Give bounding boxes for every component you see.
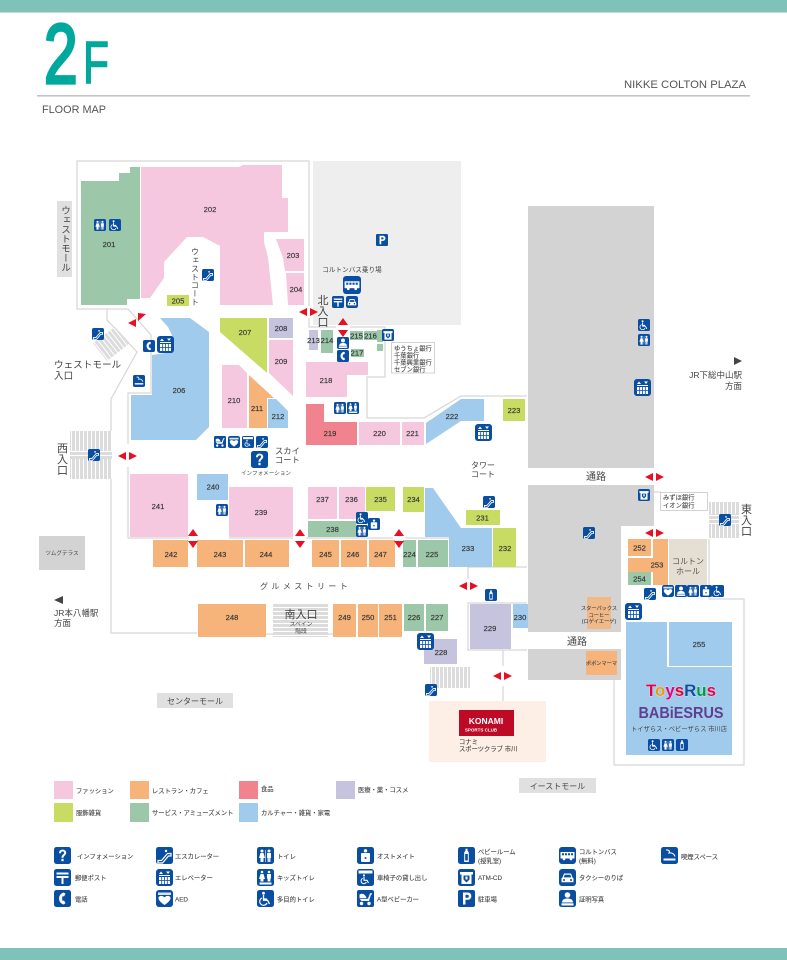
icon legend: A型ベビーカー — [377, 894, 419, 904]
Tsumugu terrace: ツムグテラス — [45, 549, 79, 557]
icon legend: 多目的トイレ — [277, 894, 315, 904]
subtitle: FLOOR MAP — [42, 104, 106, 116]
shop 236: 236 — [345, 495, 358, 504]
shop 226 — [404, 604, 424, 631]
title: 2F — [44, 7, 109, 101]
colour legend: レストラン・カフェ — [152, 787, 209, 795]
shop 253 — [628, 539, 668, 585]
shop 241 — [130, 474, 188, 537]
south entrance: スペイン — [290, 621, 313, 628]
shop 213: 213 — [307, 336, 320, 345]
shop 202: 202 — [204, 205, 216, 214]
Konami logo: KONAMI — [469, 716, 503, 726]
mizuho bank box: イオン銀行 — [663, 500, 695, 510]
shop 239 — [229, 487, 293, 537]
north entrance label: 北入口 — [316, 294, 328, 328]
shop 211 — [249, 375, 274, 428]
shop 245: 245 — [319, 550, 332, 559]
tower court label: コート — [471, 470, 495, 479]
red entrance arrows — [118, 308, 664, 680]
shop 248 — [198, 604, 266, 637]
Tsumugu terrace — [39, 536, 85, 570]
shop 237 — [308, 487, 337, 519]
icon legend: タクシーのりば — [579, 873, 624, 882]
mizuho bank box: みずほ銀行 — [663, 492, 695, 502]
gourmet street label: グルメストリート — [260, 581, 351, 591]
east entrance stairs — [709, 502, 739, 538]
shop 240 — [197, 474, 228, 500]
south entrance — [273, 604, 328, 637]
Konami caption: コナミ — [459, 738, 478, 746]
shop 224: 224 — [403, 550, 416, 559]
south stairs — [430, 667, 470, 688]
JR Shimosa-Nakayama direction: 方面 — [725, 381, 742, 391]
shop 254 — [628, 572, 651, 585]
passage label upper: 通路 — [586, 470, 606, 483]
shop 248: 248 — [226, 613, 238, 622]
colour legend: 服飾雑貨 — [76, 808, 101, 817]
icon legend: オストメイト — [377, 852, 415, 860]
shop 204: 204 — [290, 285, 302, 294]
icon legend: 証明写真 — [579, 894, 604, 904]
west mall stairs — [93, 327, 130, 361]
colour legend: 食品 — [261, 785, 274, 793]
Colton bus stop label: コルトンバス乗り場 — [322, 265, 382, 274]
shop 202 — [141, 165, 288, 305]
shop 204 — [286, 273, 304, 305]
shop 238: 238 — [326, 525, 339, 534]
shop 242 — [153, 540, 188, 567]
colour legend: 医療・薬・コスメ — [358, 785, 408, 794]
grey east mall block bottom — [528, 649, 621, 680]
west mall entrance label: 入口 — [54, 371, 73, 382]
Starbucks — [581, 597, 617, 629]
shop 222 — [426, 399, 484, 444]
icon legend: エスカレーター — [175, 852, 219, 860]
bank box: 千葉銀行 — [394, 350, 420, 360]
grey parking area — [313, 161, 461, 325]
shop 234 — [403, 487, 424, 512]
shop 235: 235 — [374, 495, 387, 504]
shop 239: 239 — [255, 508, 267, 517]
shop 210 — [222, 365, 247, 428]
shop 244: 244 — [260, 550, 272, 559]
shop 218: 218 — [320, 376, 332, 385]
shop 240: 240 — [207, 482, 219, 492]
icon legend: 駐車場 — [478, 894, 498, 904]
shop 254: 254 — [633, 574, 646, 584]
grey east mall block upper — [528, 206, 654, 468]
shop 241: 241 — [152, 502, 164, 511]
shop 210: 210 — [228, 396, 240, 405]
shop 209 — [269, 340, 293, 396]
icon legend: (授乳室) — [478, 856, 501, 865]
shop 237: 237 — [316, 495, 329, 504]
shop 250 — [358, 604, 378, 637]
shop 229: 229 — [484, 624, 496, 633]
shop 208 — [269, 318, 293, 338]
icon legend: インフォメーション — [77, 852, 133, 860]
shop 252 — [628, 539, 651, 556]
tower court label — [471, 461, 495, 479]
shop 247: 247 — [374, 550, 387, 559]
shop 201 — [81, 167, 140, 305]
west mall entrance label: ウェストモール — [54, 360, 122, 371]
shop 249: 249 — [338, 613, 351, 622]
shop 220: 220 — [373, 429, 386, 438]
shop 231: 231 — [476, 514, 489, 522]
icon legend: キッズトイレ — [277, 873, 315, 882]
information label: インフォメーション — [241, 470, 291, 477]
shop 250: 250 — [362, 613, 374, 622]
shop 246: 246 — [347, 550, 359, 559]
bank box: セブン銀行 — [394, 364, 426, 374]
shop 252: 252 — [633, 544, 646, 552]
top band — [0, 0, 787, 12]
colour legend — [54, 781, 408, 822]
shop 245 — [312, 540, 339, 567]
shop 228 — [424, 639, 457, 664]
icon legend: エレベーター — [175, 873, 213, 882]
shop 223: 223 — [508, 406, 520, 415]
shop 242: 242 — [165, 550, 177, 559]
shop 225: 225 — [426, 550, 438, 559]
small service units — [377, 330, 383, 351]
east mall label — [519, 778, 596, 793]
bank box: 千葉興業銀行 — [394, 358, 432, 366]
west entrance stairs — [70, 431, 112, 479]
shop 216: 216 — [364, 332, 377, 340]
Toys R Us store — [626, 622, 732, 755]
shop 246 — [341, 540, 367, 567]
shop 213 — [307, 330, 320, 350]
shop 207: 207 — [239, 328, 251, 337]
bank box: ゆうちょ銀行 — [394, 344, 432, 352]
shop 226: 226 — [408, 613, 420, 622]
shop 212 — [268, 399, 288, 428]
shop 220 — [359, 422, 400, 445]
shop 235 — [366, 487, 395, 511]
shop 209: 209 — [275, 357, 287, 366]
shop 236 — [339, 487, 365, 519]
shop 232 — [493, 528, 516, 567]
title: 2F: 2 — [44, 7, 78, 101]
passage label lower: 通路 — [567, 635, 587, 648]
Starbucks: コーヒー — [589, 612, 609, 619]
shop 222: 222 — [446, 412, 458, 421]
shop 253: 253 — [651, 560, 663, 570]
label: west mall: ウェストモール — [59, 206, 71, 272]
header rule — [37, 95, 750, 96]
Konami sports club — [429, 701, 546, 762]
shop 223 — [503, 399, 525, 421]
shop 243: 243 — [214, 550, 226, 559]
colour legend: サービス・アミューズメント — [152, 808, 233, 817]
JR Motoyawata direction — [54, 596, 99, 628]
Toys R Us store: 255 — [693, 640, 705, 649]
icon legend: トイレ — [277, 854, 296, 860]
shop 229 — [470, 604, 511, 649]
Colton Hall: ホール — [676, 567, 700, 576]
Popomama — [586, 651, 617, 675]
icon legend: AED — [175, 896, 188, 904]
shop 208: 208 — [275, 324, 287, 333]
Toys R Us logo: ToysRus — [646, 681, 716, 700]
shop 224 — [403, 540, 416, 567]
shop 230 — [513, 604, 528, 628]
map icons — [88, 219, 731, 751]
Konami logo: SPORTS CLUB — [465, 728, 498, 732]
shop 203 — [276, 239, 304, 271]
shop 207 — [220, 318, 267, 373]
icon legend — [54, 847, 718, 907]
icon legend: 郵便ポスト — [75, 874, 106, 882]
Popomama: ポポンマーマ — [586, 659, 617, 667]
sky court label — [275, 446, 300, 465]
west court label: ウェストコート — [190, 248, 200, 306]
shop 247 — [369, 540, 395, 567]
store caption: トイザらス・ベビーザらス 市川店 — [631, 724, 727, 733]
shop 219 — [306, 404, 357, 445]
shop 233: 233 — [462, 544, 474, 553]
south entrance: 南入口 — [284, 608, 318, 621]
colour legend: カルチャー・雑貨・家電 — [261, 808, 331, 817]
shop 219: 219 — [324, 429, 336, 438]
shop 238 — [308, 521, 356, 537]
shop 211: 211 — [251, 404, 263, 413]
shop 228: 228 — [435, 648, 447, 657]
JR Shimosa-Nakayama direction — [689, 357, 742, 391]
shop 230: 230 — [514, 613, 526, 622]
building outlines — [77, 161, 744, 765]
shop 233 — [425, 488, 492, 567]
icon legend: (無料) — [579, 856, 596, 865]
shop 221 — [402, 422, 424, 445]
shop 249 — [333, 604, 356, 637]
brand name: NIKKE COLTON PLAZA — [624, 79, 747, 91]
colour legend: ファッション — [76, 787, 114, 795]
shop 206 — [131, 318, 209, 440]
Colton Hall — [669, 539, 707, 585]
shop 231 — [466, 510, 500, 525]
shop 214 — [321, 330, 333, 353]
shop 205 — [167, 295, 189, 306]
shop 201: 201 — [103, 240, 115, 249]
icon legend: ATM-CD — [478, 875, 502, 882]
Starbucks: (ロゲイエーゲ) — [582, 617, 616, 625]
icon legend: ベビールーム — [478, 847, 516, 856]
bank box — [392, 342, 434, 374]
shop 227 — [426, 604, 448, 631]
sky court label: スカイ — [275, 446, 300, 456]
Babies R Us logo: BABiESRUS — [638, 705, 724, 722]
shop 251 — [379, 604, 402, 637]
icon legend: コルトンバス — [579, 848, 617, 856]
shop 251: 251 — [384, 613, 397, 622]
east mall label: イーストモール — [530, 782, 585, 791]
JR Shimosa-Nakayama direction: JR下総中山駅 — [689, 370, 742, 380]
shop 244 — [245, 540, 289, 567]
center mall label — [157, 693, 233, 708]
icon legend: 車椅子の貸し出し — [377, 873, 427, 882]
shop 221: 221 — [406, 429, 419, 438]
shop 225 — [418, 540, 448, 567]
shop 214: 214 — [321, 336, 333, 345]
Starbucks: スターバックス — [581, 604, 617, 612]
grey east mall block lower — [528, 485, 654, 632]
shop 205: 205 — [172, 296, 184, 306]
label: west mall — [57, 201, 72, 277]
east entrance label: 東入口 — [740, 503, 752, 536]
bottom band — [0, 948, 787, 960]
mizuho bank box — [660, 492, 708, 510]
shop 215: 215 — [350, 332, 363, 340]
shop 227: 227 — [431, 613, 443, 622]
Konami sports club: スポーツクラブ 市川 — [459, 744, 517, 753]
JR Motoyawata direction: 方面 — [54, 618, 72, 628]
shop 212: 212 — [272, 412, 284, 421]
Konami logo — [459, 710, 514, 736]
shop 234: 234 — [407, 495, 420, 504]
shop 217: 217 — [351, 348, 363, 358]
tower court label: タワー — [471, 461, 495, 470]
shop 232: 232 — [499, 544, 511, 553]
shop 203: 203 — [287, 251, 299, 260]
center mall label: センターモール — [167, 697, 223, 706]
west mall entrance label — [54, 360, 122, 382]
west entrance label: 西入口 — [56, 442, 68, 476]
icon legend: 喫煙スペース — [681, 852, 718, 861]
Colton Hall: コルトン — [672, 557, 704, 566]
shop 218 — [306, 362, 368, 397]
JR Motoyawata direction: JR本八幡駅 — [54, 608, 99, 618]
title: 2F: F — [83, 29, 109, 96]
shop 206: 206 — [173, 386, 185, 395]
shop 243 — [197, 540, 243, 567]
south entrance: 階段 — [295, 627, 307, 635]
sky court label: コート — [275, 455, 300, 465]
icon legend: 電話 — [75, 894, 88, 904]
